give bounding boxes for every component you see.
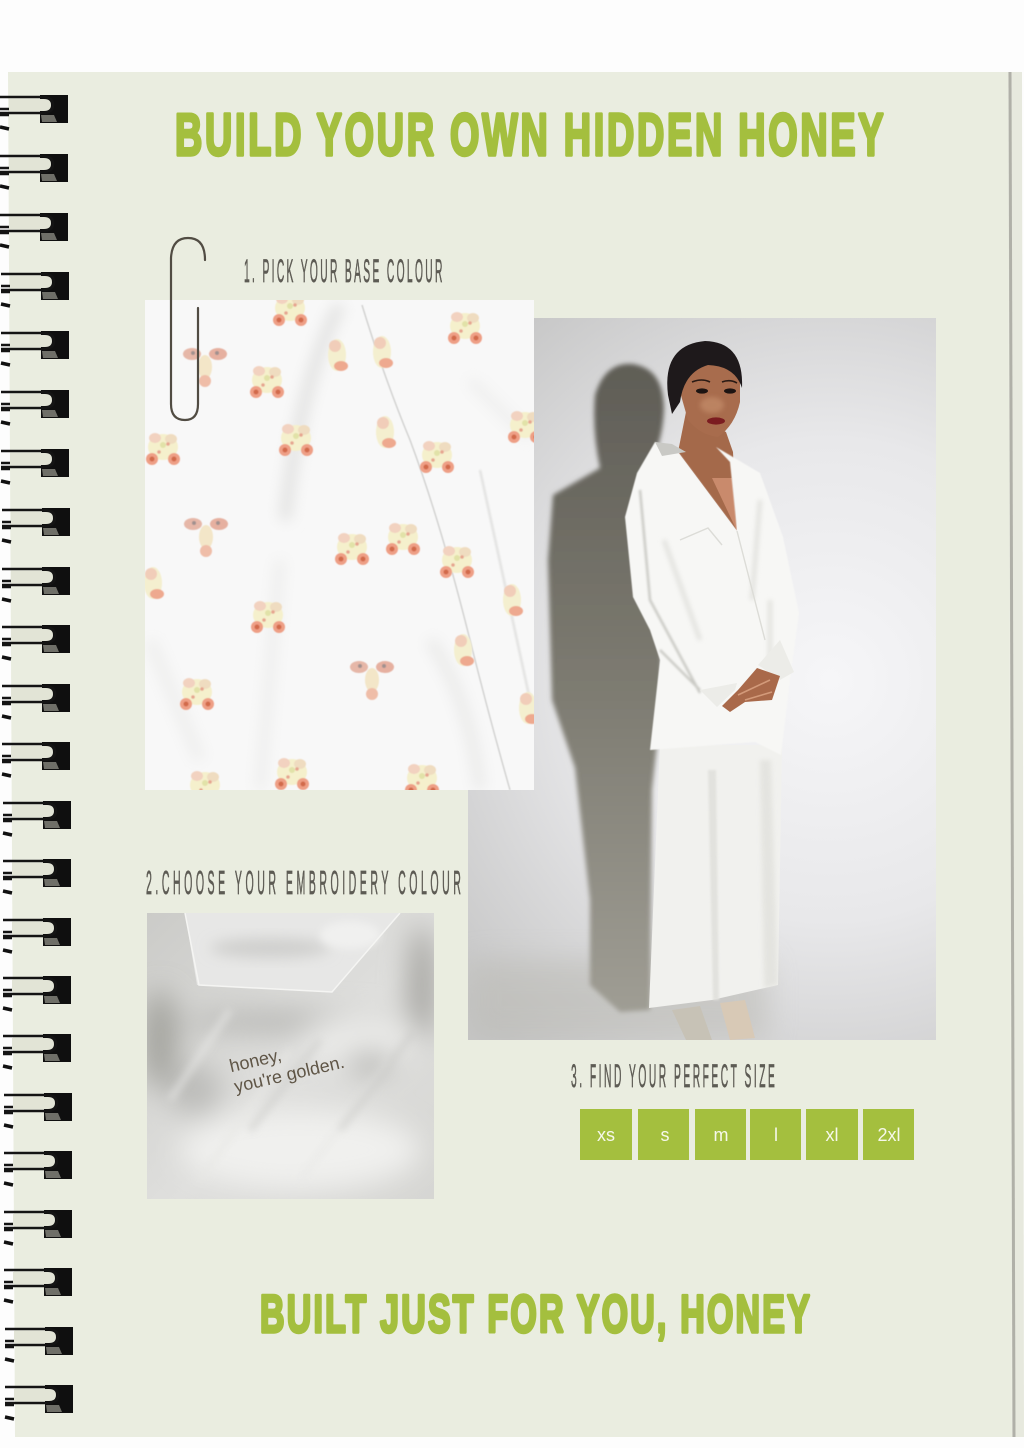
floor tone bbox=[468, 960, 768, 1040]
model shadow bbox=[548, 364, 664, 1012]
title: BUILD YOUR OWN HIDDEN HONEY bbox=[175, 103, 883, 168]
shirt bbox=[625, 442, 799, 755]
size xl bbox=[806, 1109, 858, 1160]
spiral binding bbox=[0, 95, 73, 1419]
shoes bbox=[672, 1006, 712, 1040]
eyes and brows bbox=[692, 380, 737, 394]
size m bbox=[695, 1109, 746, 1160]
hands bbox=[722, 668, 780, 712]
size selector bbox=[580, 1109, 914, 1160]
diagonal streaks bbox=[169, 1012, 402, 1130]
closing heading: BUILT JUST FOR YOU, HONEY bbox=[260, 1286, 810, 1344]
size xs bbox=[580, 1109, 632, 1160]
hair bbox=[667, 341, 742, 414]
size l bbox=[750, 1109, 801, 1160]
size l: l bbox=[774, 1125, 778, 1145]
size s: s bbox=[660, 1125, 670, 1145]
size xl: xl bbox=[826, 1125, 838, 1145]
embroidered motifs bbox=[144, 294, 542, 803]
fabric shading bbox=[142, 925, 436, 1190]
size m: m bbox=[714, 1125, 728, 1145]
paperclip bbox=[171, 238, 205, 420]
size xs: xs bbox=[597, 1125, 615, 1145]
cuffs bbox=[700, 683, 737, 707]
embroidered text: honey, bbox=[227, 1045, 283, 1076]
step 3 label: 3. FIND YOUR PERFECT SIZE bbox=[571, 1059, 775, 1095]
collar bbox=[655, 442, 686, 456]
model figure bbox=[625, 341, 799, 1040]
pocket bbox=[185, 913, 400, 992]
trousers bbox=[649, 745, 782, 1008]
photo: fabric print swatch bbox=[144, 294, 542, 803]
photo: embroidered inner pocket bbox=[142, 913, 436, 1199]
size 2xl bbox=[863, 1109, 914, 1160]
embroidered text: you're golden. bbox=[232, 1052, 346, 1097]
ear bbox=[670, 386, 680, 406]
step 1 label: 1. PICK YOUR BASE COLOUR bbox=[244, 254, 442, 290]
size s bbox=[638, 1109, 689, 1160]
step 2 label: 2.CHOOSE YOUR EMBROIDERY COLOUR bbox=[146, 866, 461, 902]
neck and chest bbox=[678, 412, 737, 531]
fabric folds bbox=[278, 306, 481, 781]
face bbox=[681, 365, 740, 432]
photo: model in white shirt and trousers bbox=[468, 318, 936, 1040]
size 2xl: 2xl bbox=[877, 1125, 901, 1145]
shirt folds bbox=[640, 490, 700, 693]
lips bbox=[707, 417, 725, 425]
